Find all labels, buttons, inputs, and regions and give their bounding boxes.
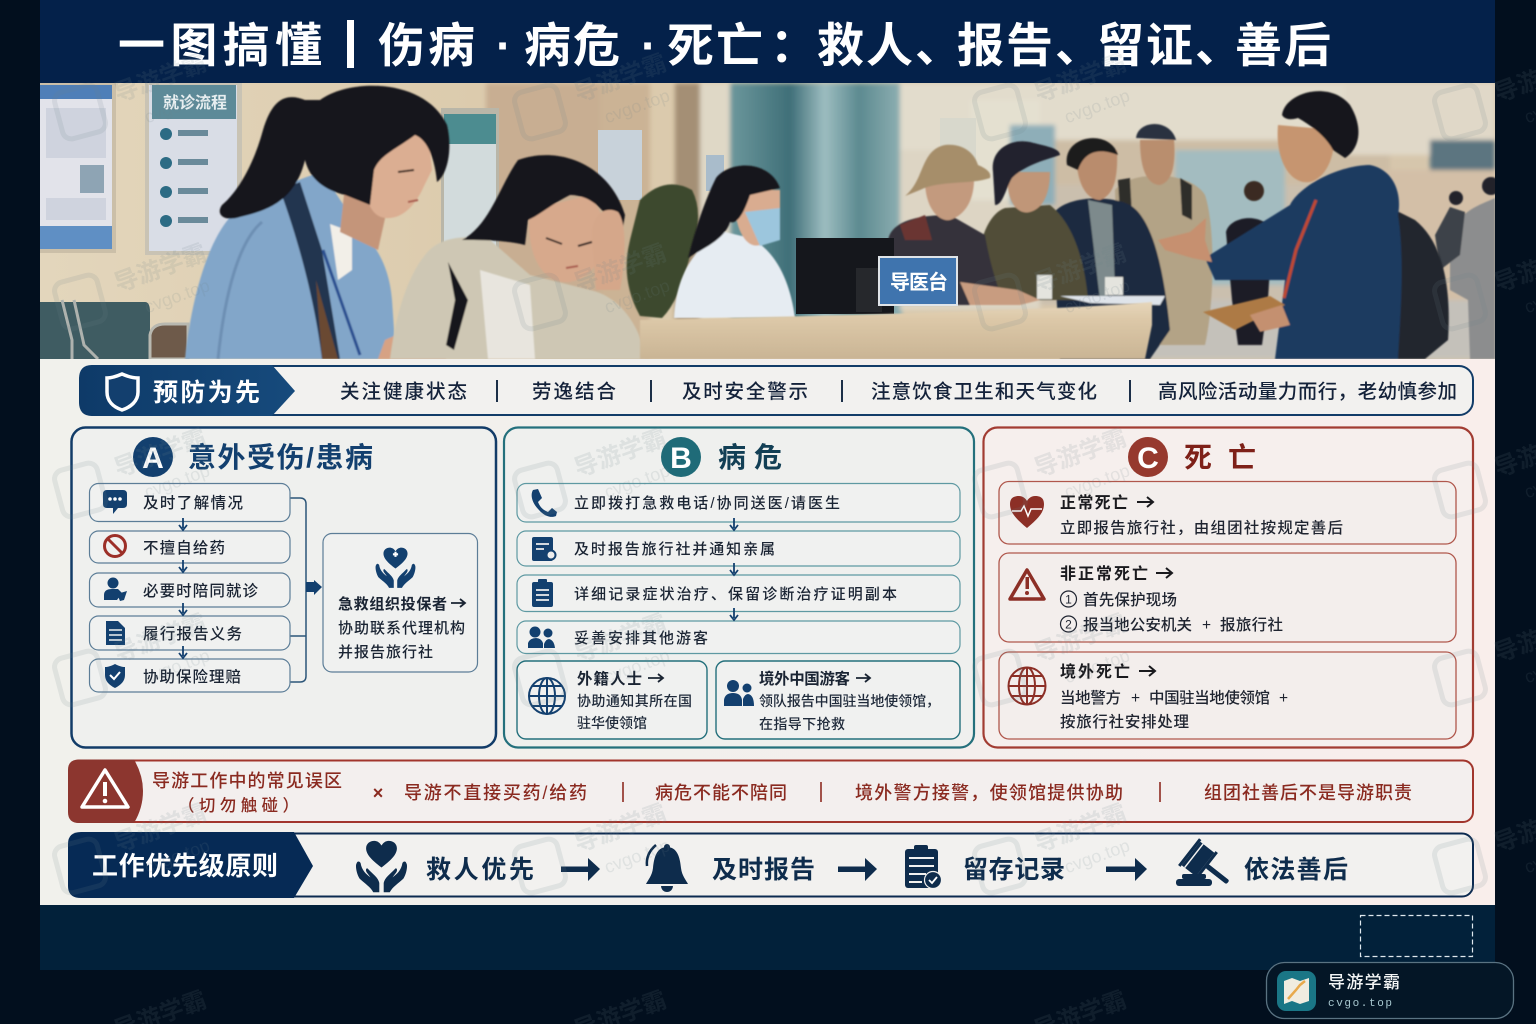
card: foreign tourists: 外籍人士 xyxy=(577,669,642,688)
step: report to agency: 及时报告旅行社并通知亲属 xyxy=(574,541,775,558)
card: Chinese tourists abroad xyxy=(716,661,960,739)
icon: clipboard with check xyxy=(905,845,942,888)
misconceptions bar: × xyxy=(373,783,383,803)
priority principles bar xyxy=(68,832,1473,898)
flow arrows between steps xyxy=(179,518,187,658)
watermarks: cvgo.top xyxy=(1062,85,1132,127)
icon: warning triangle xyxy=(1010,570,1044,599)
arrow xyxy=(1156,568,1172,578)
step: report duty xyxy=(90,616,290,650)
misconceptions bar: （切勿触碰） xyxy=(178,796,299,815)
first aid box: 并报告旅行社 xyxy=(338,644,433,661)
panel C heading: 死 亡 xyxy=(1184,442,1256,473)
watermarks: cvgo.top xyxy=(142,835,212,877)
card: normal death xyxy=(999,482,1456,544)
misconceptions bar: 导游工作中的常见误区 xyxy=(152,771,342,791)
watermarks: cvgo.top xyxy=(602,85,672,127)
watermarks: 导游学霸 xyxy=(1031,240,1130,298)
arrow xyxy=(1139,666,1155,676)
card: abnormal death xyxy=(999,553,1456,642)
first aid box: 急救组织投保者 xyxy=(338,595,447,613)
title banner: 一图搞懂 xyxy=(118,19,322,72)
card: foreign tourists: 驻华使领馆 xyxy=(577,715,647,731)
arrow xyxy=(451,599,465,607)
wall posters: 就诊流程 xyxy=(163,93,227,112)
panel B heading: 病 危 xyxy=(718,442,782,473)
panel A: injury or illness xyxy=(72,428,496,748)
misconceptions bar xyxy=(68,760,1473,823)
badge C: C xyxy=(1137,442,1159,475)
watermarks: cvgo.top xyxy=(142,645,212,687)
misconceptions bar: 病危不能不陪同 xyxy=(655,783,787,803)
reception desk xyxy=(640,302,1152,359)
card: normal death: 正常死亡 xyxy=(1060,494,1128,512)
step: report duty: 履行报告义务 xyxy=(143,625,242,643)
number 2: 2 xyxy=(1065,618,1072,632)
card: abnormal death: 非正常死亡 xyxy=(1060,565,1148,583)
dashed placeholder box xyxy=(1360,916,1472,956)
card: foreign tourists xyxy=(517,661,707,739)
priority principles bar: 工作优先级原则 xyxy=(92,851,278,881)
potted plant xyxy=(627,184,698,318)
card: foreign tourists: 协助通知其所在国 xyxy=(577,693,692,709)
arrow xyxy=(838,858,877,881)
guide woman xyxy=(185,86,450,359)
arrow xyxy=(1106,858,1147,881)
group of tourists xyxy=(888,124,1212,359)
watermarks: 导游学霸 xyxy=(571,50,670,108)
panel B: critical illness xyxy=(504,428,974,748)
step: accompany to hospital xyxy=(90,573,290,607)
step: no self medication: 不擅自给药 xyxy=(143,538,225,557)
badge A: A xyxy=(142,442,164,475)
prevention bar: 高风险活动量力而行，老幼慎参加 xyxy=(1158,381,1457,403)
watermarks: cvgo.top xyxy=(1062,460,1132,502)
card: death abroad: 按旅行社安排处理 xyxy=(1060,712,1189,731)
arrow to first-aid box xyxy=(306,580,322,595)
card: Chinese tourists abroad: 在指导下抢救 xyxy=(759,716,845,732)
watermarks: cvgo.top xyxy=(602,275,672,317)
icon: hands with heart xyxy=(376,548,415,588)
watermarks: 导游学霸 xyxy=(571,425,670,483)
badge A xyxy=(133,437,173,477)
step: keep records xyxy=(517,575,960,612)
card: abnormal death: + xyxy=(1202,617,1211,634)
prevention bar: 关注健康状态 xyxy=(340,381,467,403)
arrow xyxy=(561,858,600,881)
step: call emergency xyxy=(517,484,960,522)
waiting chairs xyxy=(40,300,188,359)
watermarks: 导游学霸 xyxy=(1031,800,1130,858)
watermarks: 导游学霸 xyxy=(1031,50,1130,108)
watermarks: 导游学霸 xyxy=(571,800,670,858)
step: no self medication xyxy=(90,531,290,563)
icon: globe xyxy=(1008,668,1046,705)
step: keep records: 详细记录症状治疗、保留诊断治疗证明副本 xyxy=(574,586,897,603)
priority tag xyxy=(68,832,313,898)
watermarks: cvgo.top xyxy=(1062,835,1132,877)
watermarks: 导游学霸 xyxy=(111,800,210,858)
step: understand the situation xyxy=(90,484,290,522)
prevention bar: 注意饮食卫生和天气变化 xyxy=(871,381,1097,403)
watermarks: 导游学霸 xyxy=(111,425,210,483)
wall posters xyxy=(40,83,976,255)
card: Chinese tourists abroad: 领队报告中国驻当地使领馆， xyxy=(759,693,940,709)
watermarks: cvgo.top xyxy=(142,85,212,127)
icon: globe xyxy=(529,678,565,714)
step: accompany to hospital: 必要时陪同就诊 xyxy=(143,582,258,600)
guide man with backpack xyxy=(1158,91,1449,359)
first aid box: 协助联系代理机构 xyxy=(338,620,465,637)
flow connector bracket xyxy=(290,498,306,682)
brand badge xyxy=(1266,962,1514,1018)
title banner xyxy=(40,0,1495,83)
icon: shield xyxy=(107,374,138,410)
watermarks: 导游学霸 xyxy=(1031,610,1130,668)
first aid box xyxy=(323,534,478,672)
card: death abroad: 当地警方 xyxy=(1060,688,1121,707)
card: death abroad: + xyxy=(1131,690,1140,707)
priority principles bar: 留存记录 xyxy=(963,856,1065,884)
badge C xyxy=(1128,437,1168,477)
prevention bar xyxy=(79,365,1473,416)
watermarks: 导游学霸 xyxy=(571,240,670,298)
icon: bell xyxy=(646,844,688,892)
card: abnormal death: 报当地公安机关 xyxy=(1083,616,1192,634)
icon: warning triangle xyxy=(82,770,128,807)
step: call emergency: 立即拨打急救电话/协同送医/请医生 xyxy=(574,494,840,512)
arrow xyxy=(1137,497,1153,507)
watermarks: cvgo.top xyxy=(602,835,672,877)
watermarks: cvgo.top xyxy=(142,275,212,317)
poster footer band xyxy=(40,905,1495,970)
badge B xyxy=(661,437,701,477)
card: death abroad: 中国驻当地使领馆 xyxy=(1149,689,1270,707)
prevention bar: 劳逸结合 xyxy=(532,381,616,403)
icon: hands with heart xyxy=(356,841,407,892)
icon: heart with pulse xyxy=(1010,496,1044,528)
watermarks: 导游学霸 xyxy=(571,610,670,668)
watermarks: cvgo.top xyxy=(1062,275,1132,317)
light content area xyxy=(40,359,1495,905)
blue desk sign and monitor: 导医台 xyxy=(890,270,948,294)
step: arrange other tourists xyxy=(517,621,960,654)
priority principles bar: 救人优先 xyxy=(426,856,534,884)
card: death abroad: + xyxy=(1279,690,1288,707)
prevention tag xyxy=(79,365,295,416)
watermarks: 导游学霸 xyxy=(111,240,210,298)
step: report to agency xyxy=(517,531,960,566)
title banner: 伤病·病危·死亡：救人、报告、留证、善后 xyxy=(378,19,1331,72)
panel C: death xyxy=(984,428,1473,748)
step: arrange other tourists: 妥善安排其他游客 xyxy=(574,629,708,647)
number 2 xyxy=(1060,616,1076,632)
brand badge: cvgo.top xyxy=(1328,998,1392,1010)
card: abnormal death: 报旅行社 xyxy=(1220,616,1283,634)
brand badge: 导游学霸 xyxy=(1328,972,1400,992)
arrow xyxy=(856,674,870,682)
warning tag xyxy=(68,760,143,823)
step: insurance claim xyxy=(90,659,290,692)
card: normal death: 立即报告旅行社，由组团社按规定善后 xyxy=(1060,518,1343,537)
number 1 xyxy=(1060,591,1076,607)
prevention bar: 预防为先 xyxy=(153,379,260,407)
watermarks: 导游学霸 xyxy=(111,50,210,108)
hero photo: hospital help desk scene xyxy=(40,83,1500,359)
step: insurance claim: 协助保险理赔 xyxy=(143,668,241,686)
watermarks: cvgo.top xyxy=(142,460,212,502)
watermarks: cvgo.top xyxy=(602,645,672,687)
icon: map logo xyxy=(1277,971,1316,1011)
watermarks: cvgo.top xyxy=(602,460,672,502)
priority principles bar: 及时报告 xyxy=(712,856,815,884)
blue desk sign and monitor xyxy=(796,238,958,314)
misconceptions bar: 组团社善后不是导游职责 xyxy=(1204,783,1412,803)
flow arrows between steps xyxy=(730,518,738,620)
watermarks: 导游学霸 xyxy=(111,610,210,668)
card: abnormal death: 首先保护现场 xyxy=(1083,591,1177,609)
watermarks: 导游学霸 xyxy=(1031,425,1130,483)
nurse at desk xyxy=(674,166,795,318)
panel A heading: 意外受伤/患病 xyxy=(188,442,373,473)
icon: gavel xyxy=(1176,838,1238,896)
number 1: 1 xyxy=(1065,592,1072,606)
arrow xyxy=(648,674,663,682)
card: Chinese tourists abroad: 境外中国游客 xyxy=(759,669,850,688)
misconceptions bar: 导游不直接买药/给药 xyxy=(404,783,587,803)
seated woman xyxy=(390,155,645,359)
watermarks: cvgo.top xyxy=(1062,645,1132,687)
prevention bar: 及时安全警示 xyxy=(682,381,808,403)
icon: people xyxy=(724,680,754,706)
misconceptions bar: 境外警方接警，使领馆提供协助 xyxy=(855,783,1123,803)
card: death abroad xyxy=(999,652,1456,739)
background figures xyxy=(1226,177,1500,359)
badge B: B xyxy=(670,442,692,475)
priority principles bar: 依法善后 xyxy=(1244,856,1348,884)
card: death abroad: 境外死亡 xyxy=(1060,662,1130,681)
step: understand the situation: 及时了解情况 xyxy=(143,494,243,512)
